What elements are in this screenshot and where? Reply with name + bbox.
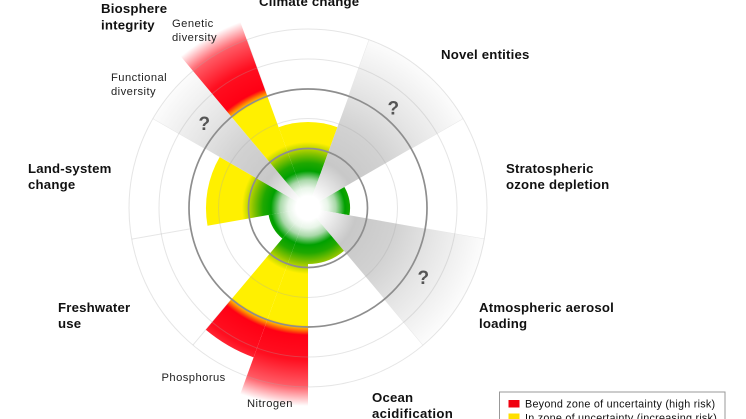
sublabel: nitrogen: Nitrogen [247,398,293,410]
label: ocean acidification: Ocean [372,390,413,405]
label: novel entities: Novel entities [441,47,530,62]
wedge: genetic diversity [179,20,308,208]
sublabel: functional diversity [111,72,167,98]
wedge: freshwater use [269,208,308,239]
label: stratospheric ozone depletion: Stratospheric [506,161,594,176]
wedge: stratospheric ozone depletion [308,187,350,215]
question mark: aerosol loading: ? [418,268,429,289]
sublabel: functional diversity: diversity [111,86,156,98]
label: land-system change: change [28,177,75,192]
label: ocean acidification [372,390,453,419]
label: atmospheric aerosol loading [479,300,614,331]
label: freshwater use: Freshwater [58,300,130,315]
question mark: functional diversity: ? [198,114,210,135]
label: stratospheric ozone depletion [506,161,609,192]
safe boundary rings [189,89,427,327]
sublabel: phosphorus: Phosphorus [162,372,226,384]
question mark: novel entities: ? [388,98,399,120]
wedge: nitrogen [240,208,308,408]
label: biosphere integrity: integrity [101,18,155,32]
legend swatch: high risk [508,400,520,408]
label: stratospheric ozone depletion: ozone depletion [506,177,609,192]
label: biosphere integrity: Biosphere [101,1,167,16]
legend [500,392,725,419]
label: freshwater use: use [58,316,81,331]
sublabel: genetic diversity: Genetic [172,18,214,30]
label: atmospheric aerosol loading: Atmospheric aerosol [479,300,614,315]
label: biosphere integrity [101,1,167,32]
label: land-system change: Land-system [28,161,112,176]
wedge: phosphorus [206,208,308,357]
wedge: novel entities [308,40,463,208]
sublabel: genetic diversity: diversity [172,32,217,44]
label: freshwater use [58,300,130,331]
light rings [129,29,487,387]
wedge: land-system change [206,157,308,226]
wedge: functional diversity [153,71,308,208]
wedge: climate change [279,122,337,208]
sublabel: genetic diversity [172,18,217,44]
sublabel: functional diversity: Functional [111,72,167,84]
grid spokes [132,40,484,387]
radar chart [129,20,487,408]
wedge: ocean acidification [308,208,344,264]
label: atmospheric aerosol loading: loading [479,316,527,331]
wedge: atmospheric aerosol loading [308,208,484,345]
label: land-system change [28,161,112,192]
legend swatch: increasing risk [508,414,520,419]
legend text: high risk: Beyond zone of uncertainty (high risk) [525,398,715,410]
